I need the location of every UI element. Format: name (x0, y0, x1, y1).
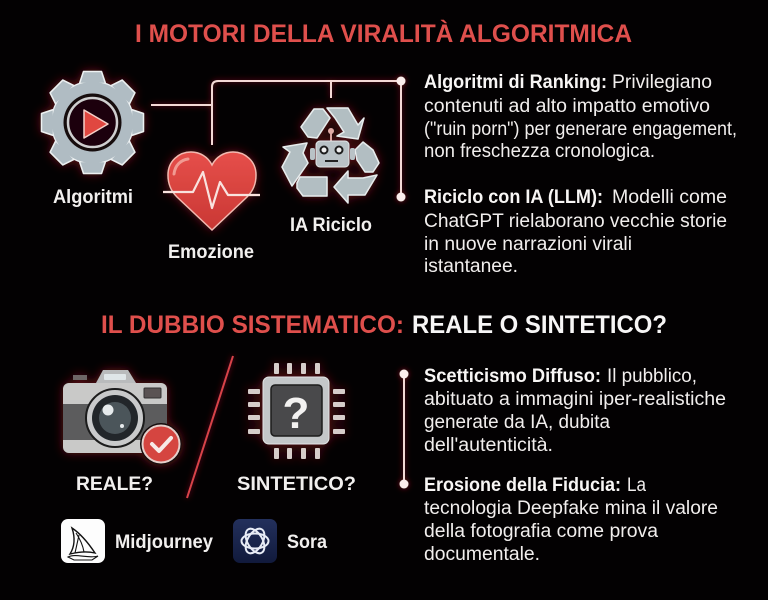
text block: Riciclo con IA: istantanee. (424, 256, 518, 277)
text block: Erosione della Fiducia: La (627, 475, 646, 496)
text block: Erosione della Fiducia (424, 475, 718, 565)
text block: Scetticismo Diffuso (424, 366, 726, 456)
text block: Algoritmi di Ranking: ("ruin porn") per generare engagement, (424, 119, 737, 140)
text block: Scetticismo Diffuso: dell'autenticità. (424, 435, 553, 456)
label: SINTETICO?: SINTETICO? (237, 473, 356, 495)
logo: Sora (233, 519, 277, 563)
icon: camera with check badge (63, 370, 182, 465)
heading: dubbio sistematico: REALE O SINTETICO? (412, 311, 667, 339)
heading: dubbio sistematico: IL DUBBIO SISTEMATICO: (101, 311, 404, 339)
text block: Riciclo con IA: in nuove narrazioni virali (424, 234, 632, 255)
icon: gear with play button (42, 72, 144, 174)
label: Algoritmi: Algoritmi (53, 186, 133, 208)
text block: Algoritmi di Ranking: non freschezza cronologica. (424, 141, 655, 162)
divider slash (187, 356, 233, 498)
text block: Scetticismo Diffuso: Scetticismo Diffuso: (424, 366, 601, 387)
text block: Scetticismo Diffuso: Il pubblico, (607, 366, 697, 387)
title: motori della viralità: I MOTORI DELLA VIRALITÀ ALGORITMICA (135, 19, 632, 48)
text block: Riciclo con IA: ChatGPT rielaborano vecchie storie (424, 211, 727, 232)
connector lines: top section (151, 76, 406, 202)
label: Midjourney: Midjourney (115, 531, 213, 553)
text block: Erosione della Fiducia: documentale. (424, 544, 540, 565)
label: REALE?: REALE? (76, 473, 153, 495)
text block: Algoritmi di Ranking: contenuti ad alto impatto emotivo (424, 96, 710, 117)
label: IA Riciclo: IA Riciclo (290, 214, 372, 236)
text block: Riciclo con IA: Riciclo con IA (LLM): (424, 187, 603, 208)
text block: Algoritmi di Ranking (424, 72, 737, 162)
logo: Midjourney (61, 519, 105, 563)
text block: Scetticismo Diffuso: abituato a immagini iper-realistiche (424, 389, 726, 410)
label: Sora: Sora (287, 531, 327, 553)
text block: Erosione della Fiducia: tecnologia Deepfake mina il valore (424, 498, 718, 519)
text block: Riciclo con IA: Modelli come (612, 187, 727, 208)
text block: Algoritmi di Ranking: Privilegiano (612, 72, 712, 93)
text block: Erosione della Fiducia: della fotografia come prova (424, 521, 658, 542)
text block: Riciclo con IA (424, 187, 727, 277)
connector line: bottom section (400, 370, 408, 488)
icon: recycling arrows with robot (282, 108, 379, 203)
label: Emozione: Emozione (168, 241, 254, 263)
icon: chip with question mark (248, 363, 345, 459)
icon: heart with pulse (163, 152, 260, 230)
heading: dubbio sistematico (101, 311, 667, 339)
text block: Scetticismo Diffuso: generate da IA, dubita (424, 412, 610, 433)
text block: Algoritmi di Ranking: Algoritmi di Ranking: (424, 72, 607, 93)
icon: chip with question mark: ? (283, 389, 309, 438)
text block: Erosione della Fiducia: Erosione della Fiducia: (424, 475, 621, 496)
